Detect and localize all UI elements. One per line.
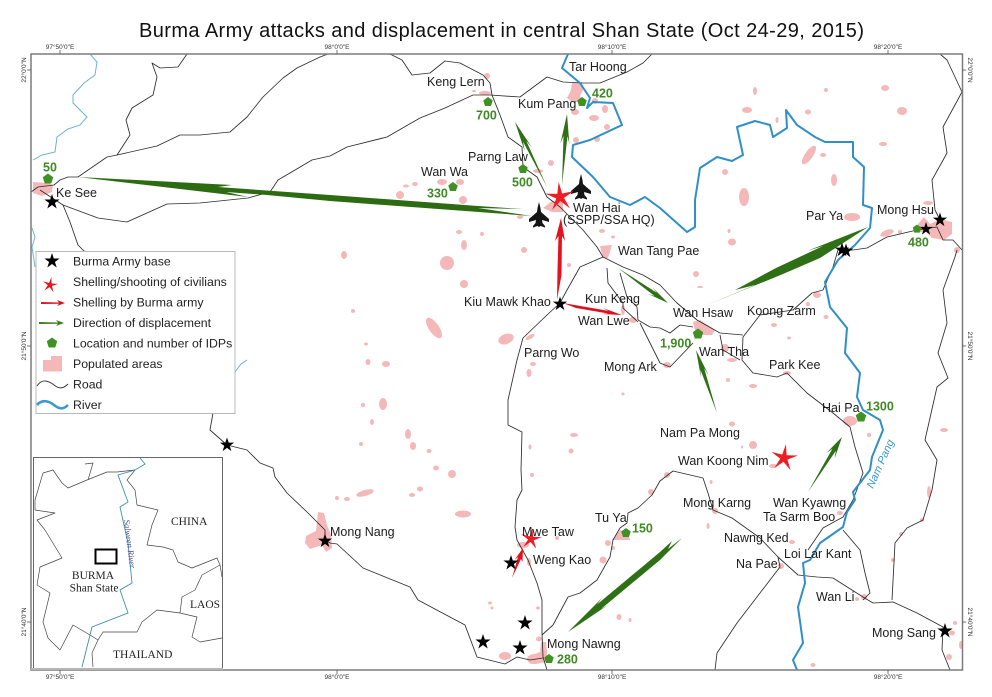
legend: river: [37, 398, 102, 412]
place names: Tar Hoong: [569, 60, 627, 74]
legend: populated areas: [43, 356, 163, 372]
inset: labels: BURMA: [72, 570, 115, 582]
axis ticks and coordinates: 21°40'0"N: [966, 608, 974, 637]
arrow: displacement to Kum Pang: [560, 114, 569, 185]
populated areas: [33, 73, 963, 667]
axis ticks and coordinates: 98°10'0"E: [598, 673, 627, 681]
place names: Hai Pa: [822, 401, 860, 415]
inset: labels: LAOS: [190, 599, 220, 611]
axis ticks and coordinates: 22°0'0"N: [20, 57, 28, 83]
legend: Burma Army base: [44, 253, 171, 268]
place names: Wan Tang Pae: [618, 244, 699, 258]
secondary rivers (west): [32, 54, 247, 372]
IDP location markers: [43, 97, 921, 663]
place names: Wan Hai: [573, 201, 620, 215]
IDP numbers: 1,900: [660, 336, 691, 350]
place names: Wan Koong Nim: [678, 454, 769, 468]
arrow: displacement Wan Kyawng to Hai Pa: [808, 437, 842, 492]
legend: IDPs: Location and number of IDPs: [73, 336, 232, 350]
arrow: displacement to Mong Nawng: [568, 538, 682, 632]
legend: road: Road: [73, 378, 103, 392]
inset: borders: [35, 463, 222, 667]
place names: Ta Sarm Boo: [763, 510, 835, 524]
title: Burma Army attacks and displacement in central Shan State (Oct 24-29, 2015): [139, 20, 864, 42]
arrow: displacement Nam Pa Mong to Wan Hsaw: [696, 350, 717, 413]
arrow: shelling Kiu Mawk Khao to Wan Hai: [555, 218, 565, 300]
inset: study area box: [96, 550, 116, 564]
axis ticks and coordinates: 98°20'0"E: [874, 673, 903, 681]
place names: Weng Kao: [533, 553, 591, 567]
Burma Army bases: [44, 194, 953, 654]
IDP numbers: 150: [632, 522, 653, 536]
arrow: displacement to Keng Lern: [515, 122, 547, 187]
red star: Wan Koong Nim: [769, 442, 799, 471]
place names: Wan Hsaw: [673, 306, 734, 320]
red star: Mwe Taw: [519, 527, 543, 549]
axis ticks and coordinates: 97°50'0"E: [46, 43, 75, 51]
arrow: displacement Wan Hai to Ke See: [78, 177, 532, 216]
place names: Keng Lern: [427, 75, 485, 89]
axis ticks and coordinates: 21°40'0"N: [20, 607, 28, 636]
axis ticks and coordinates: 98°0'0"E: [325, 43, 350, 51]
IDP numbers: 700: [476, 108, 497, 122]
place names: Mong Ark: [604, 360, 658, 374]
jet: near Wan Hai east: [571, 174, 591, 200]
axis ticks and coordinates: 97°50'0"E: [46, 673, 75, 681]
place names: Mong Nawng: [547, 637, 621, 651]
IDP numbers: 420: [592, 86, 613, 100]
inset: labels: CHINA: [171, 516, 208, 528]
panel: legend: [36, 252, 235, 414]
axis ticks and coordinates: 98°10'0"E: [598, 43, 627, 51]
place names: Mong Hsu: [877, 203, 934, 217]
place names: Wan Wa: [421, 165, 468, 179]
river label: Nam Pang: Nam Pang: [865, 437, 897, 490]
axis ticks and coordinates: 21°50'0"N: [966, 332, 974, 361]
place names: Na Pae: [736, 557, 778, 571]
place names: Parng Wo: [524, 346, 579, 360]
place names: Wan Kyawng: [773, 496, 846, 510]
axis ticks and coordinates: 22°0'0"N: [966, 57, 974, 83]
place names: Mong Nang: [330, 525, 395, 539]
arrow: shelling Kiu Mawk Khao to Wan Lwe: [563, 303, 622, 315]
legend: river: River: [73, 398, 102, 412]
place names: Parng Law: [468, 150, 529, 164]
legend: Burma Army base: Burma Army base: [73, 254, 171, 268]
place names: Ke See: [56, 186, 97, 200]
place names: Kun Keng: [585, 292, 640, 306]
legend: road: [37, 378, 103, 392]
legend: shelling of civilians: Shelling/shooting of civilians: [73, 275, 227, 289]
IDP numbers: 330: [427, 186, 448, 200]
place names: Kiu Mawk Khao: [464, 295, 551, 309]
IDP numbers: 480: [908, 236, 929, 250]
inset: labels: Shan State: [70, 582, 118, 594]
axis ticks and coordinates: 98°20'0"E: [874, 43, 903, 51]
IDP numbers: [43, 86, 929, 666]
place names: Tu Ya: [595, 511, 627, 525]
IDP numbers: 280: [557, 652, 578, 666]
place names: Kum Pang: [518, 97, 576, 111]
place names: (SSPP/SSA HQ): [563, 213, 655, 227]
IDP numbers: 500: [512, 176, 533, 190]
inset: labels: Salween River: [122, 519, 138, 569]
place names: Par Ya: [806, 209, 843, 223]
axis ticks and coordinates: 21°50'0"N: [20, 331, 28, 360]
inset: labels: [70, 516, 220, 661]
legend: shelling of civilians: [41, 275, 227, 293]
place names: Mong Sang: [872, 626, 936, 640]
legend: shelling by Burma army: Shelling by Burma army: [73, 296, 204, 310]
legend: populated areas: Populated areas: [73, 357, 163, 371]
place names: [56, 60, 936, 651]
place names: Park Kee: [769, 358, 820, 372]
red star: Wan Hai: [544, 181, 575, 210]
river: Nam Pang: [562, 54, 883, 670]
place names: Nam Pa Mong: [660, 426, 740, 440]
IDP numbers: 50: [43, 160, 57, 174]
legend: direction of displacement: Direction of displacement: [73, 316, 212, 330]
place names: Wan Tha: [699, 345, 749, 359]
arrow: displacement to Wan Hsaw: [618, 268, 668, 303]
place names: Mong Karng: [683, 496, 751, 510]
inset locator map: [31, 458, 223, 670]
place names: Nawng Ked: [724, 531, 789, 545]
inset: Salween river: [82, 458, 145, 667]
IDP numbers: 1300: [866, 400, 894, 414]
place names: Koong Zarm: [747, 304, 816, 318]
place names: Loi Lar Kant: [784, 547, 852, 561]
place names: Wan Li: [816, 590, 854, 604]
inset: labels: THAILAND: [113, 649, 172, 661]
place names: Wan Lwe: [578, 314, 630, 328]
jet: near Wan Hai west: [529, 202, 549, 228]
arrow: displacement Wan Hsaw to Par Ya: [707, 227, 868, 305]
place names: Mwe Taw: [522, 525, 575, 539]
axis ticks and coordinates: 98°0'0"E: [325, 673, 350, 681]
arrow: shelling Weng Kao to Mwe Taw: [512, 548, 523, 578]
